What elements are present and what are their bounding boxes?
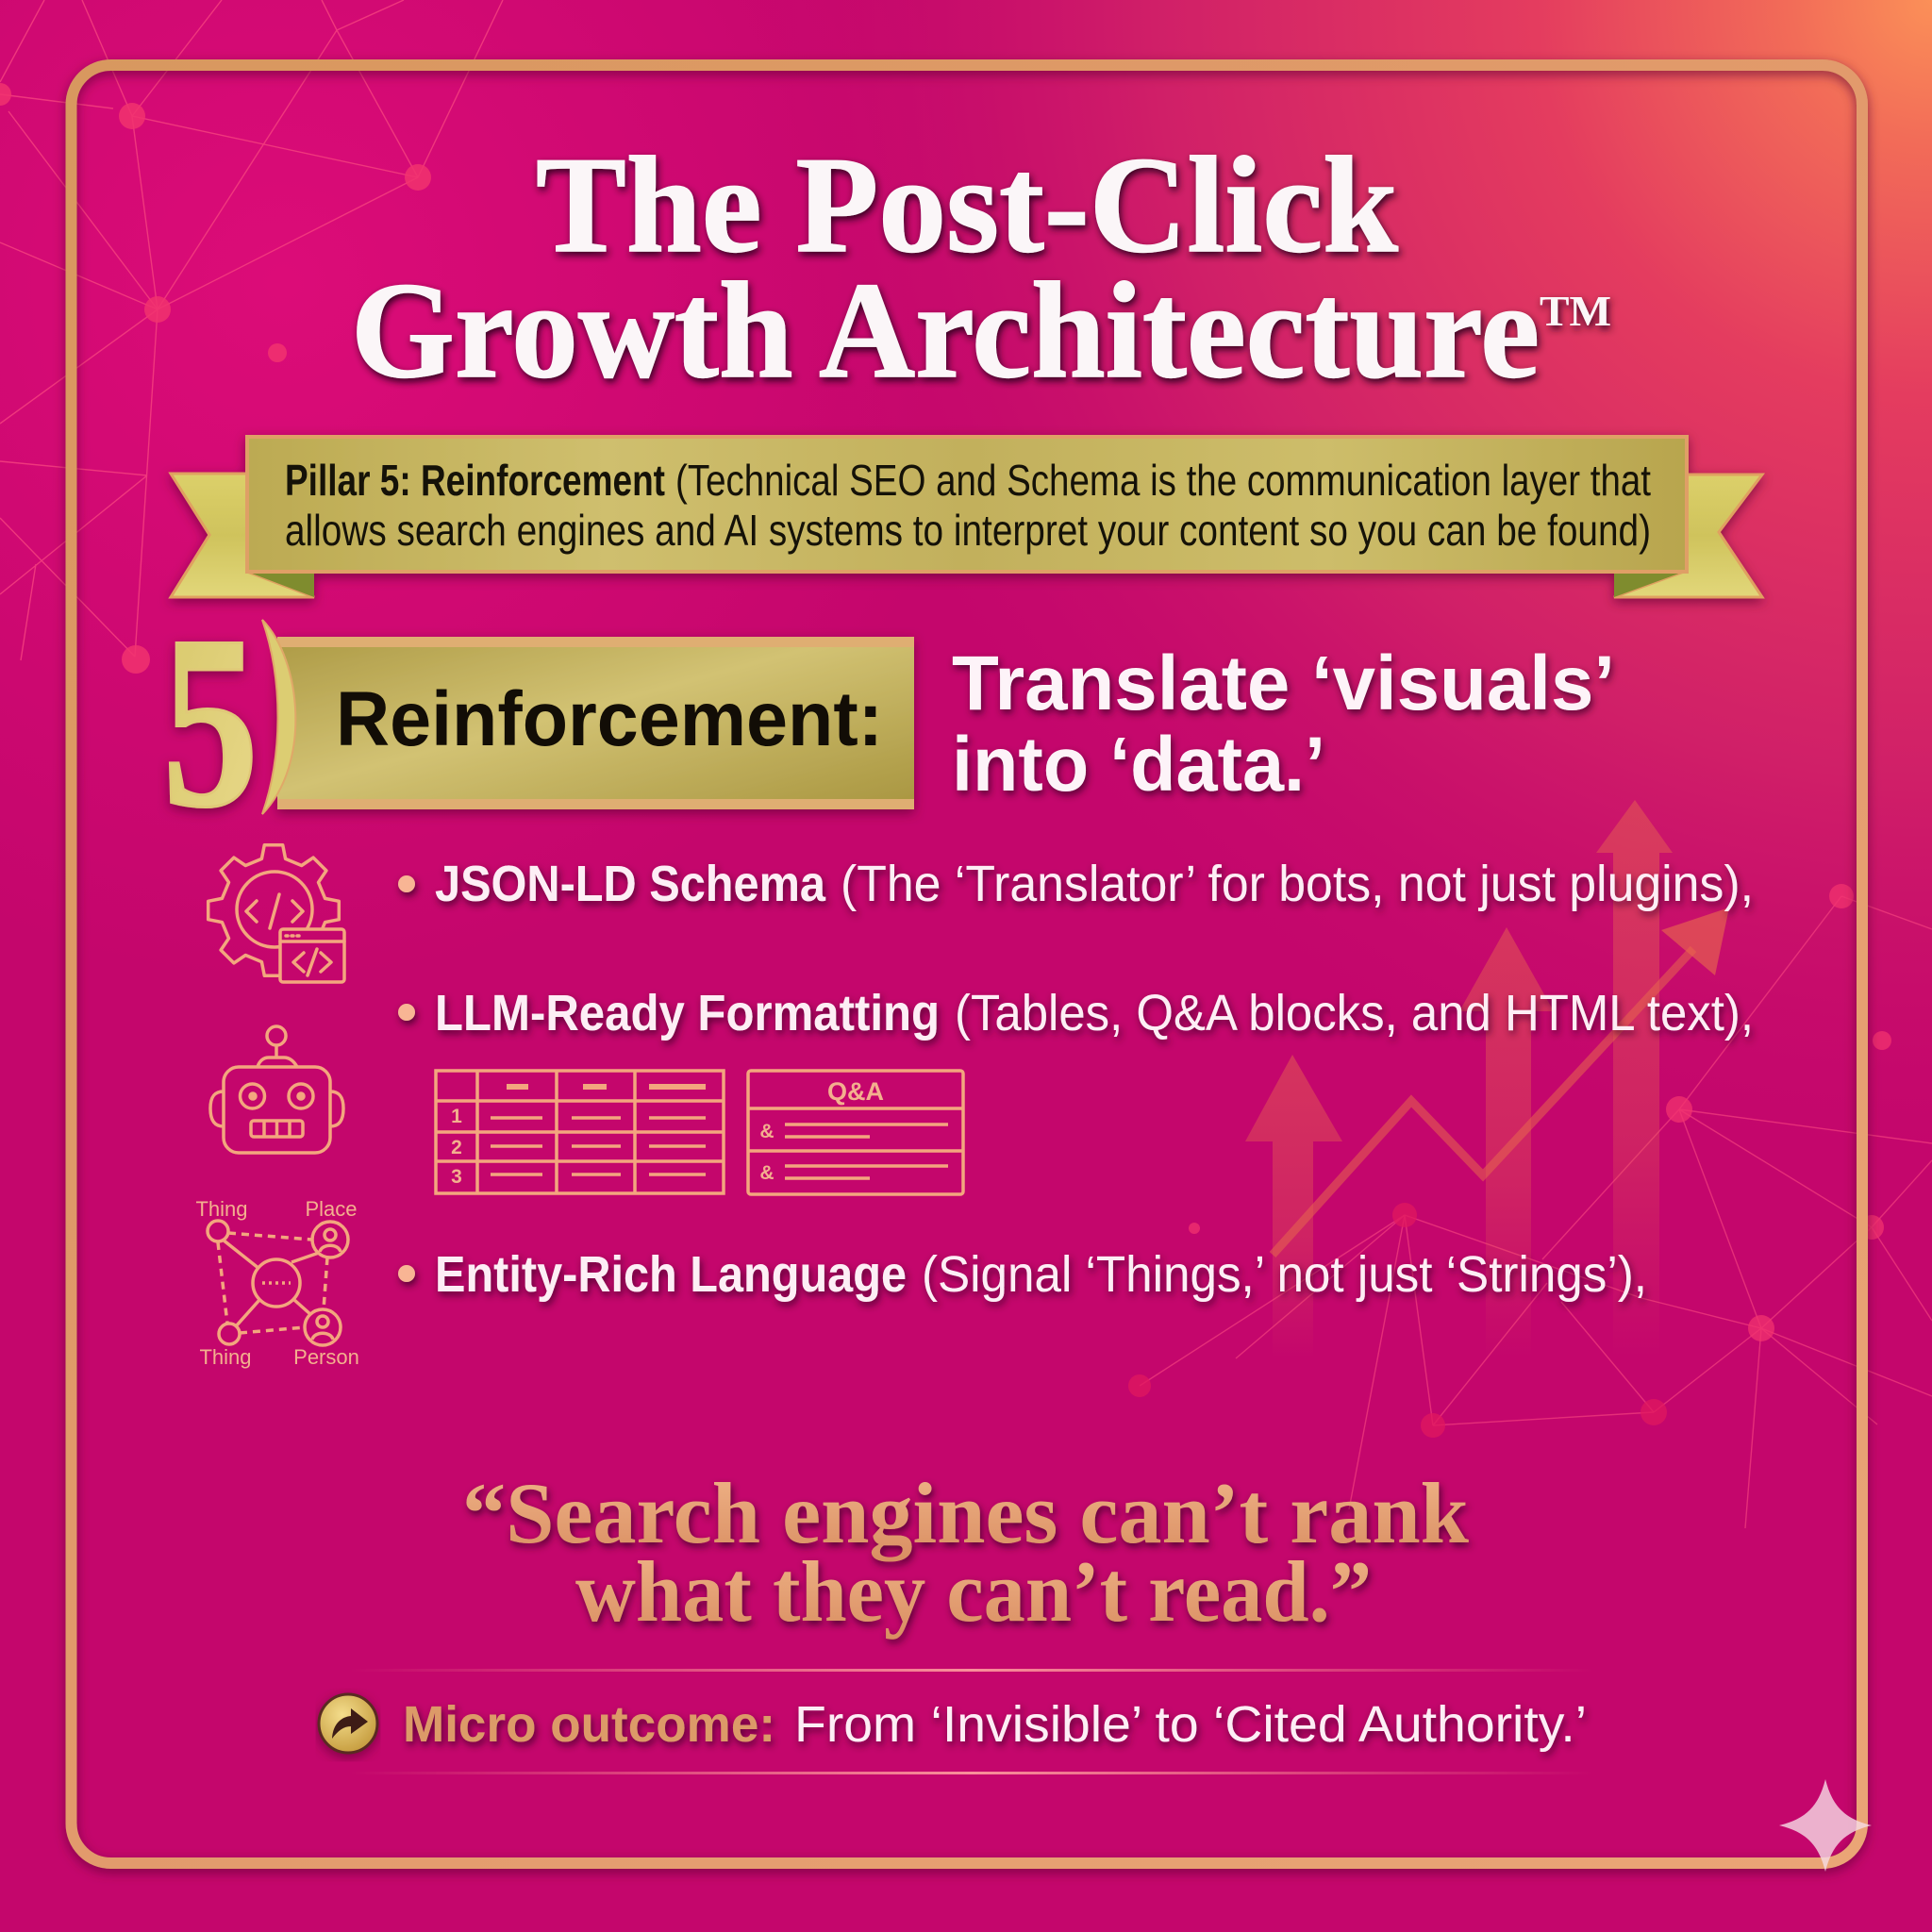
icon: entity graph bbox=[195, 1197, 359, 1369]
outcome text: Micro outcome: bbox=[403, 1696, 775, 1753]
outcome text bbox=[403, 1696, 1587, 1753]
micro outcome bbox=[319, 1694, 1587, 1753]
quote: “Search engines can’t rank bbox=[462, 1465, 1470, 1561]
number 5: 5 bbox=[162, 585, 258, 858]
bullet: LLM-Ready Formatting: LLM-Ready Formatting bbox=[435, 985, 940, 1041]
bullet: Entity-Rich Language bbox=[398, 1246, 1647, 1303]
bullet: Entity-Rich Language: Entity-Rich Language bbox=[435, 1246, 907, 1303]
icon: entity graph: Thing bbox=[195, 1197, 248, 1221]
step badge: 5 Reinforcement bbox=[162, 585, 914, 858]
network nodes: lower right bbox=[1128, 884, 1891, 1438]
divider top bbox=[349, 1669, 1594, 1672]
bullet: Entity-Rich Language: (Signal ‘Things,’ not just ‘Strings’), bbox=[922, 1246, 1647, 1303]
trend line bbox=[1273, 908, 1729, 1255]
icon: arrow coin bbox=[319, 1694, 377, 1753]
banner text: (Technical SEO and Schema is the communication layer that bbox=[675, 456, 1651, 505]
title: Growth Architecture bbox=[351, 254, 1540, 407]
bullet: JSON-LD Schema: (The ‘Translator’ for bots, not just plugins), bbox=[841, 856, 1754, 912]
icon: table: 1 bbox=[451, 1106, 462, 1127]
icon: robot bbox=[210, 1026, 343, 1153]
title bbox=[351, 128, 1611, 407]
banner text bbox=[285, 456, 1651, 555]
arrow: tall bbox=[1596, 800, 1673, 1358]
ribbon tails bbox=[171, 437, 1762, 597]
headline: translate visuals into data: into ‘data.’ bbox=[952, 722, 1325, 808]
title: The Post-Click bbox=[536, 128, 1398, 281]
bullet: LLM-Ready Formatting bbox=[398, 985, 1754, 1041]
icon: entity graph: Person bbox=[293, 1345, 359, 1369]
icon: Q&A block bbox=[748, 1071, 963, 1194]
crescent bbox=[262, 620, 295, 814]
icon: Q&A block: & bbox=[759, 1162, 774, 1184]
icon: Q&A block: & bbox=[759, 1121, 774, 1142]
growth chart watermark bbox=[1245, 800, 1729, 1358]
network nodes: top left bbox=[0, 83, 431, 674]
icon: table: 3 bbox=[451, 1166, 462, 1188]
bullet: JSON-LD Schema: JSON-LD Schema bbox=[435, 856, 826, 912]
network pattern: top left bbox=[0, 0, 503, 660]
banner text: Pillar 5: Reinforcement bbox=[285, 456, 665, 505]
quote bbox=[462, 1465, 1470, 1640]
banner text: allows search engines and AI systems to interpret your content so you can be found) bbox=[285, 506, 1651, 555]
bullet: LLM-Ready Formatting: (Tables, Q&A blocks, and HTML text), bbox=[955, 985, 1754, 1041]
arrow: small bbox=[1245, 1055, 1342, 1358]
icon: schema gear bbox=[208, 845, 344, 982]
badge label: Reinforcement: bbox=[336, 676, 883, 762]
arrow: medium bbox=[1459, 927, 1554, 1358]
icon: Q&A block: Q&A bbox=[827, 1077, 884, 1106]
icon: entity graph: Thing bbox=[199, 1345, 252, 1369]
headline: translate visuals into data bbox=[952, 641, 1615, 808]
outcome text: From ‘Invisible’ to ‘Cited Authority.’ bbox=[794, 1696, 1587, 1753]
quote: what they can’t read.” bbox=[575, 1543, 1372, 1640]
icon: table bbox=[436, 1071, 724, 1193]
icon: entity graph: Place bbox=[305, 1197, 358, 1221]
network pattern: lower right bbox=[1140, 896, 1932, 1528]
icon: table: 2 bbox=[451, 1137, 462, 1158]
headline: translate visuals into data: Translate ‘visuals’ bbox=[952, 641, 1615, 726]
banner: pillar 5 bbox=[171, 437, 1762, 597]
title: TM bbox=[1540, 287, 1611, 335]
icon: sparkle bbox=[1779, 1779, 1872, 1872]
divider bottom bbox=[349, 1772, 1594, 1774]
gold box bbox=[277, 637, 914, 809]
bullet: JSON-LD Schema bbox=[398, 856, 1754, 912]
